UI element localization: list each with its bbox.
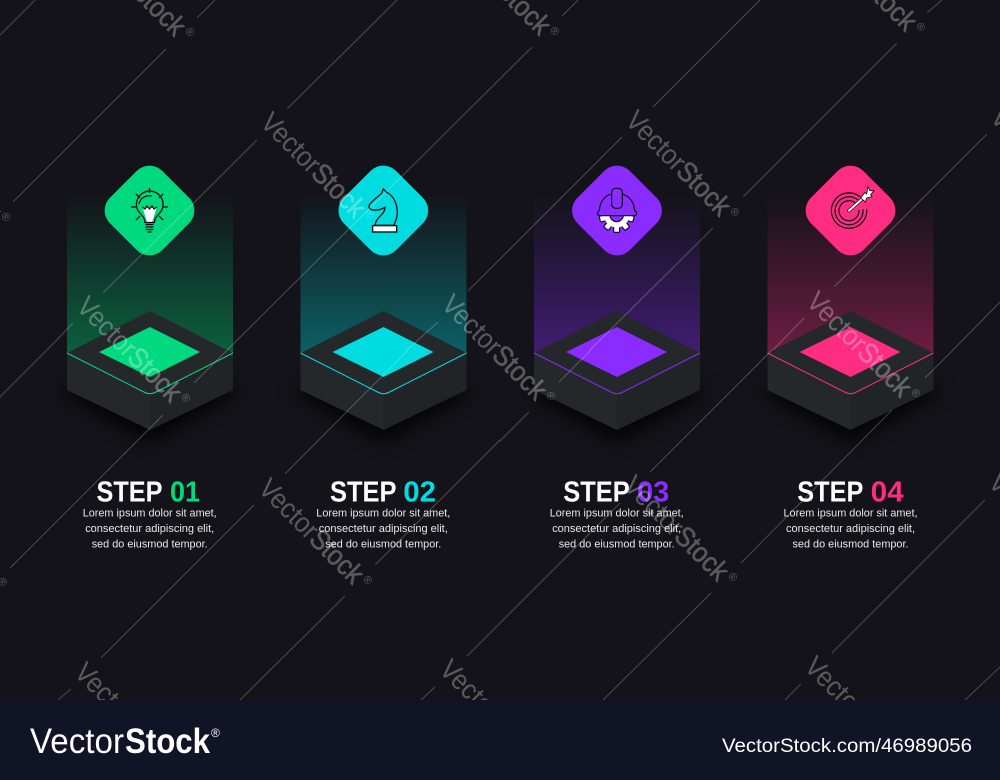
- step 02 text: [316, 508, 450, 550]
- watermarks: VectorStock: [69, 656, 187, 774]
- watermarks: ®: [727, 205, 741, 220]
- footer image id: VectorStock.com/46989056: [722, 736, 972, 757]
- icon badge 02: chess knight: [331, 158, 436, 263]
- panel: step 04: [758, 158, 942, 550]
- step 04 heading: 04: [871, 476, 904, 508]
- watermarks: VectorStock: [253, 472, 371, 590]
- watermarks: VectorStock: [71, 290, 189, 408]
- step 04 text: sed do eiusmod tempor.: [792, 538, 908, 550]
- step 03 text: Lorem ipsum dolor sit amet,: [550, 508, 684, 520]
- step 03 heading: STEP: [563, 476, 630, 508]
- block shadow 03: [525, 370, 709, 442]
- footer logo: Stock: [125, 722, 210, 761]
- glow panel 04: [768, 192, 934, 367]
- watermarks: VectorStock: [801, 285, 919, 403]
- glow panel 01: [67, 192, 233, 367]
- block shadow 02: [292, 370, 476, 442]
- watermarks: VectorStock: [620, 104, 738, 222]
- step 02 text: sed do eiusmod tempor.: [325, 538, 441, 550]
- footer logo: ®: [211, 726, 220, 740]
- watermarks: ®: [908, 386, 922, 401]
- step 04 heading: [797, 476, 904, 508]
- footer logo: [30, 722, 220, 761]
- watermarks: ®: [906, 751, 920, 766]
- step 01 text: Lorem ipsum dolor sit amet,: [83, 508, 217, 520]
- step 02 heading: STEP: [330, 476, 396, 508]
- icon badge 01: light bulb: [97, 158, 202, 263]
- glow panel 02: [300, 192, 466, 367]
- glow panel 03: [534, 192, 700, 367]
- icon badge 03: helmet and gear: [565, 158, 669, 263]
- watermarks: ®: [543, 389, 557, 404]
- step 02 text: Lorem ipsum dolor sit amet,: [316, 508, 450, 520]
- watermarks: ®: [725, 570, 739, 585]
- watermarks: ®: [360, 573, 374, 588]
- watermarks: VectorStock: [618, 469, 736, 587]
- block shadow 04: [758, 370, 942, 442]
- isometric block 03: [534, 311, 700, 430]
- watermarks: ®: [362, 207, 376, 222]
- step 03 heading: 03: [637, 476, 669, 508]
- step 01 heading: STEP: [96, 476, 162, 508]
- panel: step 03: [525, 158, 709, 550]
- step 03 text: sed do eiusmod tempor.: [559, 538, 675, 550]
- panel: step 01: [58, 158, 242, 550]
- step 01 text: sed do eiusmod tempor.: [92, 538, 208, 550]
- step 03 text: [550, 508, 684, 550]
- watermarks: ®: [178, 391, 192, 406]
- step 04 text: consectetur adipiscing elit,: [786, 523, 915, 535]
- footer logo: Vector: [30, 722, 124, 761]
- watermarks: VectorStock: [799, 650, 917, 768]
- icon badge 04: target and arrow: [798, 158, 903, 263]
- panel: step 02: [292, 158, 476, 550]
- watermarks: ®: [541, 754, 555, 769]
- step 02 heading: 02: [403, 476, 436, 508]
- watermarks: ®: [182, 25, 196, 40]
- step 02 text: consectetur adipiscing elit,: [319, 523, 448, 535]
- watermarks: ®: [176, 757, 190, 772]
- step 04 heading: STEP: [797, 476, 863, 508]
- step 01 text: consectetur adipiscing elit,: [85, 523, 214, 535]
- watermarks: VectorStock: [434, 653, 552, 771]
- isometric block 04: [768, 311, 934, 430]
- block shadow 01: [58, 370, 242, 442]
- step 04 text: [784, 508, 918, 550]
- step 01 text: [83, 508, 217, 550]
- isometric block 01: [67, 311, 233, 430]
- step 01 heading: 01: [170, 476, 200, 508]
- watermarks: ®: [913, 20, 927, 35]
- watermarks: VectorStock: [255, 106, 373, 224]
- watermarks: VectorStock: [436, 288, 554, 406]
- watermarks: ®: [547, 24, 561, 39]
- isometric block 02: [300, 311, 466, 430]
- step 03 text: consectetur adipiscing elit,: [552, 523, 681, 535]
- step 04 text: Lorem ipsum dolor sit amet,: [784, 508, 918, 520]
- footer band: [0, 700, 1000, 780]
